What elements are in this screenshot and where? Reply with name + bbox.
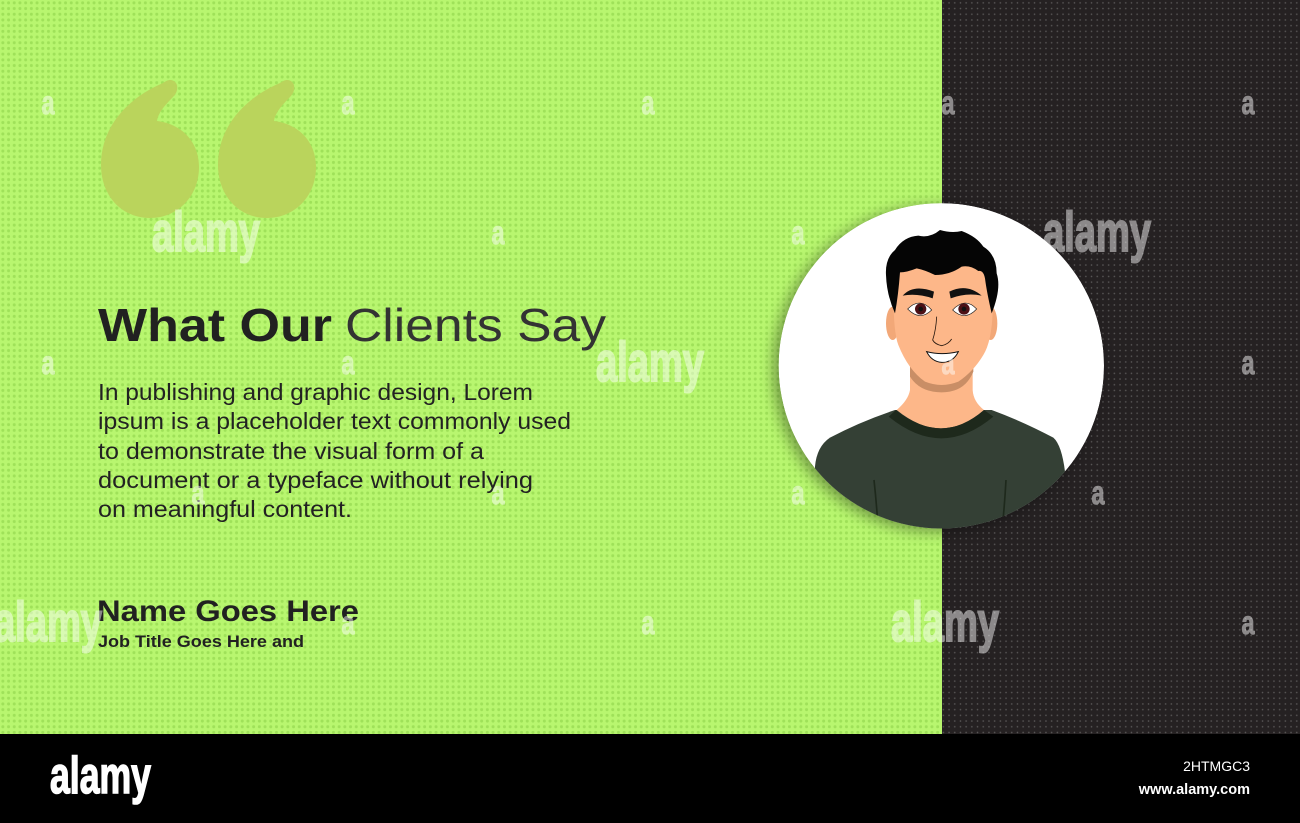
watermark: small repeated letters: a [942, 84, 955, 121]
heading: What Our [98, 299, 332, 351]
footer logo: alamy [50, 747, 151, 805]
watermark: small repeated letters: a [1242, 84, 1255, 121]
panel: green testimonial background [0, 0, 942, 734]
avatar shadow [773, 206, 1099, 532]
watermark: small repeated letters: a [42, 84, 55, 121]
watermark: small repeated letters: a [792, 214, 805, 251]
watermark: small repeated letters: a [1092, 474, 1105, 511]
avatar neck shadow [910, 365, 973, 392]
watermark: small repeated letters: a [642, 604, 655, 641]
watermark: alamy repeated wordmarks: alamy [596, 330, 704, 393]
text block: description: document or a typeface without relying [98, 467, 533, 493]
text block: description: In publishing and graphic design, Lorem [98, 379, 533, 405]
avatar shirt [813, 410, 1070, 532]
text block: description: ipsum is a placeholder text commonly used [98, 408, 571, 434]
watermark: small repeated letters: a [342, 344, 355, 381]
avatar upper chest skin [897, 410, 984, 428]
watermark: small repeated letters: a [342, 84, 355, 121]
avatar face [893, 262, 993, 385]
watermark: alamy repeated wordmarks: alamy [1043, 200, 1151, 263]
avatar eyebrows [903, 288, 982, 298]
watermark: small repeated letters: a [42, 344, 55, 381]
watermark: small repeated letters [42, 84, 1255, 641]
footer bar [0, 734, 1300, 823]
avatar smile [927, 352, 958, 362]
watermark: small repeated letters: a [192, 474, 205, 511]
watermark: small repeated letters: a [942, 344, 955, 381]
text block: description: on meaningful content. [98, 496, 352, 522]
avatar collar [889, 410, 993, 438]
watermark: small repeated letters: a [642, 84, 655, 121]
avatar neck [896, 372, 984, 410]
avatar eyes [908, 303, 977, 316]
watermark: alamy repeated wordmarks: alamy [152, 200, 260, 263]
watermark: small repeated letters: a [1242, 604, 1255, 641]
avatar nose [933, 317, 952, 346]
image id: 2HTMGC3 [1183, 758, 1250, 774]
watermark: small repeated letters: a [342, 604, 355, 641]
footer url: www.alamy.com [1138, 782, 1250, 798]
avatar ears [886, 307, 997, 340]
job title: Job Title Goes Here and [98, 632, 304, 651]
watermark: small repeated letters: a [492, 474, 505, 511]
client name: Name Goes Here [97, 595, 359, 628]
watermark: small repeated letters: a [492, 214, 505, 251]
watermark: alamy repeated wordmarks [0, 200, 1151, 653]
panel: dark side background [942, 0, 1300, 734]
avatar hair [886, 230, 998, 313]
watermark: alamy repeated wordmarks: alamy [891, 590, 999, 653]
watermark: small repeated letters: a [792, 474, 805, 511]
text block: description: to demonstrate the visual form of a [98, 438, 484, 464]
icon: quotation marks [101, 80, 316, 218]
watermark: small repeated letters: a [1242, 344, 1255, 381]
avatar: man in circle [779, 203, 1104, 532]
avatar shirt folds [874, 480, 1006, 517]
text block: description [98, 379, 571, 522]
heading: light part: Clients Say [345, 299, 606, 351]
